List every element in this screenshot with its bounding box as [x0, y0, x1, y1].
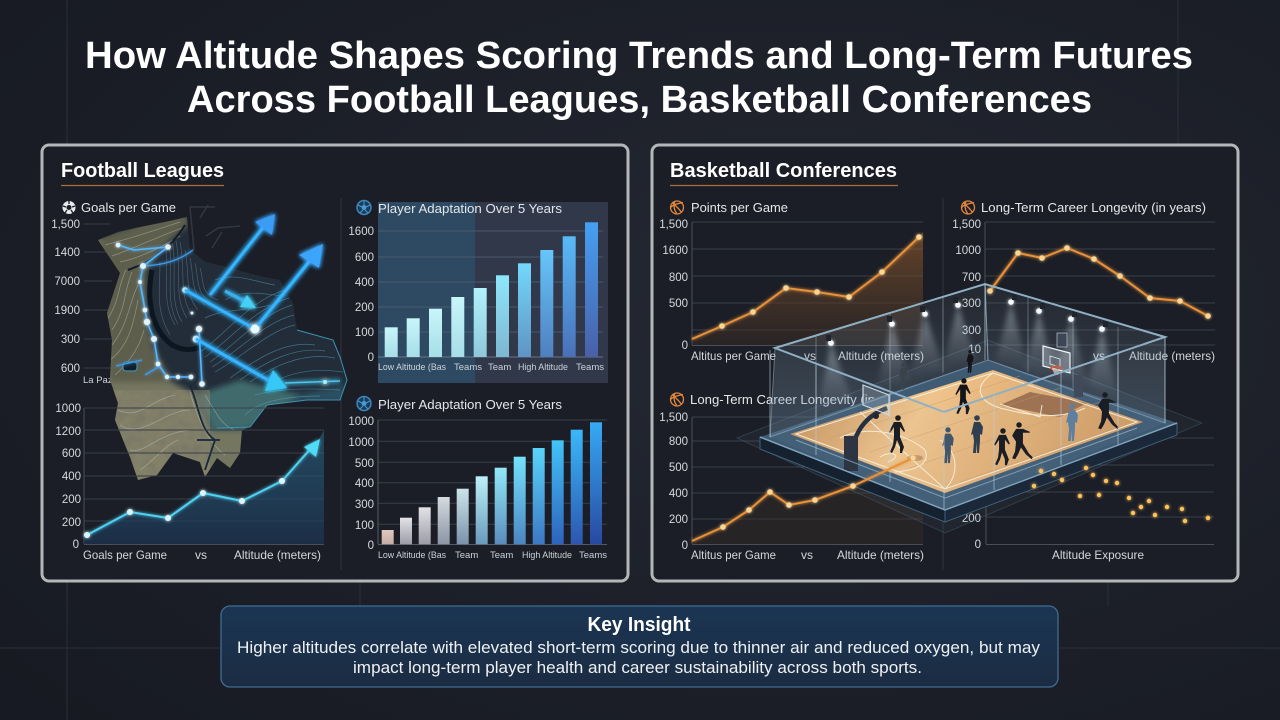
line chart: points per game: 1,500	[659, 219, 688, 231]
line chart: lower career longevity grid: Altitude (meters)	[837, 548, 924, 562]
bar chart: player adaptation bottom: Low Altitude (Bas	[378, 550, 446, 561]
heading: basketball conferences: Basketball Conferences	[670, 160, 897, 182]
line chart: points per game	[659, 200, 924, 363]
chart: goals vs altitude line: vs	[195, 548, 207, 562]
line chart: lower career longevity grid: 200	[669, 514, 688, 526]
map: altitude terrain	[98, 204, 348, 480]
bar chart: player adaptation top: Teams	[576, 362, 604, 373]
panel: basketball conferences	[652, 145, 1238, 581]
bar chart: player adaptation top: 100	[355, 327, 374, 339]
line chart: lower career longevity grid: Altitus per Game	[691, 548, 776, 562]
chart: goals per game axis: 300	[61, 334, 80, 346]
bar chart: player adaptation bottom: Team	[490, 550, 513, 561]
chart: goals per game axis: 1,500	[51, 219, 80, 231]
line chart: points per game: Points per Game	[691, 200, 788, 215]
bar chart: player adaptation top: 400	[355, 277, 374, 289]
title	[85, 35, 1193, 121]
line chart: points per game: 500	[669, 298, 688, 310]
bar chart: player adaptation bottom: High Altitude	[522, 550, 572, 561]
chart: goals vs altitude line	[55, 403, 324, 562]
callout: key insight: Higher altitudes correlate with elevated short-term scoring due to thinner air and reduced oxygen, but may	[237, 639, 1041, 657]
bar chart: player adaptation bottom: Team	[455, 550, 478, 561]
bar chart: player adaptation bottom: 0	[368, 540, 374, 552]
line chart: lower career longevity grid: 800	[669, 436, 688, 448]
icon: basketball top right	[962, 201, 974, 214]
panel: football leagues	[42, 145, 628, 581]
chart: goals vs altitude line: 200	[62, 517, 81, 529]
scatter chart: altitude exposure axes: 200	[962, 513, 981, 525]
title: How Altitude Shapes Scoring Trends and Long-Term Futures	[85, 35, 1193, 77]
line chart: points per game: 0	[682, 340, 688, 352]
hoop: near left	[844, 385, 889, 471]
chart: goals vs altitude line: 200	[62, 494, 81, 506]
scatter chart: altitude exposure points	[1032, 466, 1210, 523]
line chart: career longevity: 300	[962, 298, 981, 310]
chart: goals per game axis: 1900	[54, 305, 80, 317]
line chart: lower career longevity grid: 400	[669, 488, 688, 500]
line chart: career longevity	[952, 200, 1215, 363]
bar chart: player adaptation bottom: Player Adaptation Over 5 Years	[378, 397, 562, 412]
callout: key insight: impact long-term player health and career sustainability across both sports.	[353, 659, 922, 677]
bar chart: player adaptation bottom: 1000	[348, 437, 374, 449]
line chart: lower career longevity grid: 0	[682, 540, 688, 552]
icon: basketball	[670, 201, 684, 214]
line chart: career longevity: 10	[968, 344, 981, 356]
chart: goals vs altitude line: 400	[62, 471, 81, 483]
bar chart: player adaptation bottom: 100	[355, 520, 374, 532]
line chart: career longevity: Long-Term Career Longevity (in years)	[981, 200, 1206, 215]
court platform	[737, 340, 1202, 533]
line chart: lower career longevity grid: Long-Term Career Longevity (in	[690, 392, 875, 407]
line chart: lower career longevity grid: 500	[669, 462, 688, 474]
icon: soccer ball blue lower	[357, 396, 371, 410]
bar chart: player adaptation bottom: 400	[355, 478, 374, 490]
scatter chart: altitude exposure axes: 400	[962, 487, 981, 499]
chart: goals vs altitude line: 1000	[55, 403, 81, 415]
title: Across Football Leagues, Basketball Conferences	[187, 79, 1092, 121]
wooden court floor	[790, 370, 1143, 493]
line chart: lower career longevity grid: 1,500	[659, 412, 688, 424]
line chart: career longevity: 700	[962, 272, 981, 284]
chart: goals per game axis: 600	[61, 363, 80, 375]
chart: goals vs altitude line: 1200	[55, 426, 81, 438]
line chart: career longevity: 1,500	[952, 219, 981, 231]
bar chart: player adaptation bottom	[348, 396, 607, 561]
chart: goals per game axis	[51, 219, 113, 386]
bar chart: player adaptation top: Team	[488, 362, 511, 373]
scatter chart: altitude exposure axes	[962, 420, 1214, 562]
line chart: points per game: Altitus per Game	[691, 349, 776, 363]
line chart: lower career longevity grid: vs	[801, 548, 813, 562]
line chart: career longevity: 300	[962, 325, 981, 337]
chart: goals per game axis: 1400	[54, 247, 80, 259]
bar chart: player adaptation top: Teams	[454, 362, 482, 373]
icon: soccer ball blue	[357, 200, 371, 214]
bar chart: player adaptation top	[348, 200, 608, 383]
players on court	[889, 350, 1119, 465]
scatter chart: altitude exposure axes: 0	[975, 539, 981, 551]
bar chart: player adaptation top: 1600	[348, 226, 374, 238]
bar chart: player adaptation bottom: 300	[355, 499, 374, 511]
icon: soccer ball	[62, 201, 76, 214]
line chart: points per game: vs	[804, 349, 816, 363]
callout: key insight	[221, 606, 1058, 687]
line chart: points per game: Altitude (meters)	[838, 349, 924, 363]
line chart: lower career longevity grid	[659, 392, 924, 562]
bar chart: player adaptation top: Low Altitude (Bas	[378, 362, 446, 373]
heading: football leagues: Football Leagues	[61, 160, 224, 182]
line chart: career longevity: vs	[1093, 349, 1105, 363]
hoop: far right	[1043, 333, 1083, 397]
bar chart: player adaptation top: Player Adaptation Over 5 Years	[378, 201, 562, 216]
chart: goals vs altitude line: 600	[62, 448, 81, 460]
chart: goals per game axis: La Paz	[83, 375, 113, 386]
line chart: points per game: 1600	[662, 245, 688, 257]
bar chart: player adaptation top: 0	[368, 352, 374, 364]
bar chart: player adaptation top: 200	[355, 302, 374, 314]
bar chart: player adaptation bottom: 1000	[348, 416, 374, 428]
glowing river path	[116, 243, 205, 387]
chart: goals vs altitude line: 0	[73, 539, 79, 551]
chart: goals vs altitude line: Goals per Game	[83, 548, 167, 562]
icon: basketball lower	[670, 393, 684, 406]
bar chart: player adaptation bottom: 500	[355, 458, 374, 470]
scatter chart: altitude exposure axes: Altitude Exposure	[1052, 548, 1144, 562]
bar chart: player adaptation top: 600	[355, 252, 374, 264]
chart: goals vs altitude line: Altitude (meters)	[234, 548, 321, 562]
bar chart: player adaptation top: High Altitude	[518, 362, 568, 373]
spotlights	[818, 294, 1118, 410]
chart: goals per game axis: 7000	[54, 276, 80, 288]
back glass walls	[770, 284, 1165, 437]
line chart: career longevity: Altitude (meters)	[1129, 349, 1215, 363]
line chart: career longevity: 1000	[955, 245, 981, 257]
front glass walls	[760, 284, 1177, 510]
line chart: longevity orange line	[692, 456, 916, 541]
bar chart: player adaptation bottom: Teams	[579, 550, 607, 561]
subtitle: goals per game: Goals per Game	[81, 200, 176, 215]
callout: key insight: Key Insight	[588, 614, 691, 636]
arrows: altitude flow	[185, 214, 340, 391]
illustration: glass basketball court	[737, 284, 1202, 533]
line chart: points per game: 800	[669, 272, 688, 284]
